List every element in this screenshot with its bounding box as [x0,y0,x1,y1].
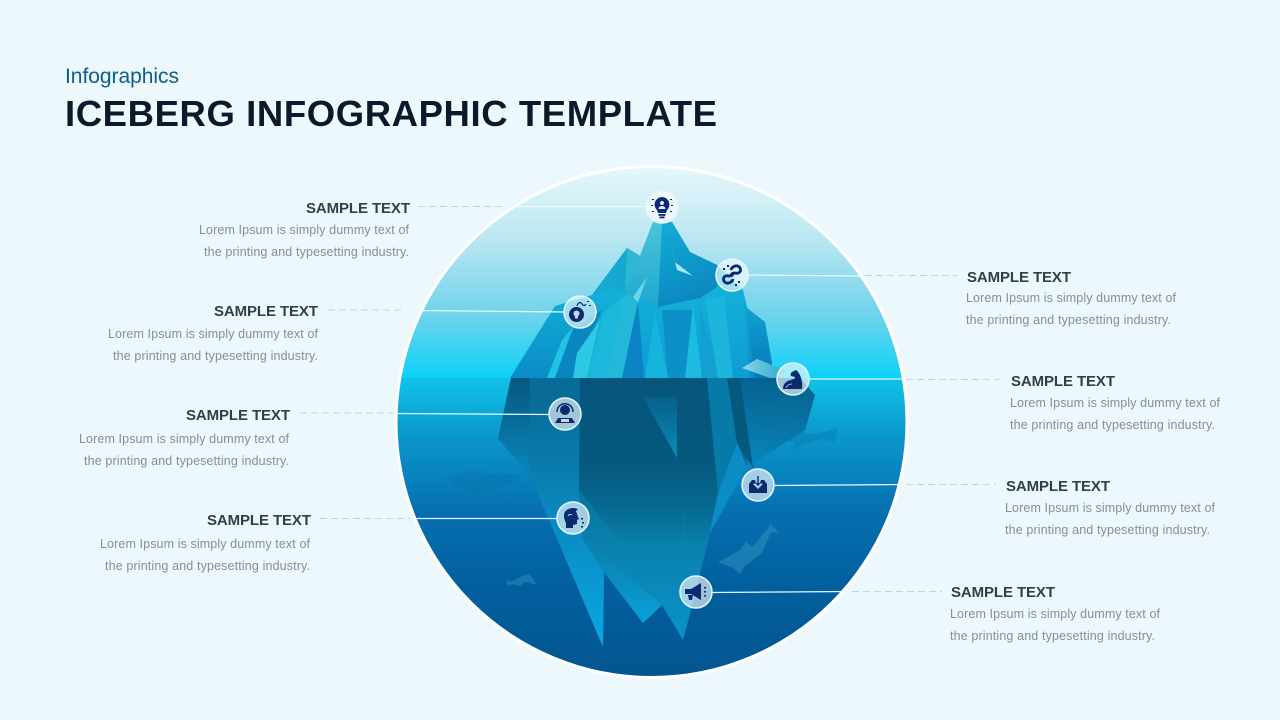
text block: left 1 [199,200,410,259]
icon: inbox download [742,469,774,501]
text block: left 3 [79,407,290,468]
text block: right 2: SAMPLE TEXT [1011,373,1115,390]
shark over right facet [788,428,838,450]
upper left facet [592,248,640,295]
berg body [510,222,772,378]
icon: chain links [716,259,748,291]
text block: right 1: SAMPLE TEXT [967,269,1071,286]
bright lower strip [611,581,662,623]
text block: left 4 [100,512,311,573]
icon: bomb [564,296,596,328]
right dark cap [658,222,717,307]
submerged body [498,378,815,647]
title: ICEBERG INFOGRAPHIC TEMPLATE [65,93,717,134]
text block: left 4: Lorem Ipsum is simply dummy text of [100,537,311,551]
icon: support agent with headset [549,398,581,430]
text block: right 3: the printing and typesetting industry. [1005,523,1210,537]
text block: left 4: SAMPLE TEXT [207,512,311,529]
text block: left 1: the printing and typesetting industry. [204,245,409,259]
text block: right 4 [950,584,1161,643]
text block: left 2 [108,303,319,363]
iceberg below water [498,378,838,647]
text block: right 3: Lorem Ipsum is simply dummy text of [1005,501,1216,515]
text block: right 1: the printing and typesetting industry. [966,313,1171,327]
text block: right 2: Lorem Ipsum is simply dummy text of [1010,396,1221,410]
text block: right 2 [1010,373,1221,432]
text block: right 4: SAMPLE TEXT [951,584,1055,601]
icon: megaphone [680,576,712,608]
body stripes [641,334,750,378]
left facet [498,378,604,647]
text block: right 3 [1005,478,1216,537]
text block: left 3: Lorem Ipsum is simply dummy text of [79,432,290,446]
text block: left 3: the printing and typesetting industry. [84,454,289,468]
text block: right 1: Lorem Ipsum is simply dummy text of [966,291,1177,305]
central peak facet [625,222,662,307]
text block: right 3: SAMPLE TEXT [1006,478,1110,495]
sea [390,378,915,683]
subtitle: Infographics [65,65,179,88]
floating ice chunk [742,359,785,378]
sky [390,160,915,378]
text block: right 2: the printing and typesetting industry. [1010,418,1215,432]
text block: left 2: SAMPLE TEXT [214,303,318,320]
text block: left 3: SAMPLE TEXT [186,407,290,424]
text block: left 2: the printing and typesetting industry. [113,349,318,363]
iceberg circle scene [390,160,915,683]
text block: left 1: SAMPLE TEXT [306,200,410,217]
text block: left 4: the printing and typesetting industry. [105,559,310,573]
text block: left 1: Lorem Ipsum is simply dummy text of [199,223,410,237]
shark silhouettes [446,470,780,586]
icon: flexed arm [777,363,809,395]
icon: light bulb [646,191,678,223]
icon: speaking head [557,502,589,534]
cap highlight [671,245,693,276]
light sliver [633,277,647,302]
iceberg above water [510,222,785,378]
right facets [740,378,815,467]
dark central columns [579,404,684,528]
text block: right 1 [966,269,1177,327]
connector lines [300,206,1000,592]
text block: right 4: Lorem Ipsum is simply dummy text of [950,607,1161,621]
text block: right 4: the printing and typesetting industry. [950,629,1155,643]
lighter triangle [643,397,677,458]
text block: left 2: Lorem Ipsum is simply dummy text of [108,327,319,341]
